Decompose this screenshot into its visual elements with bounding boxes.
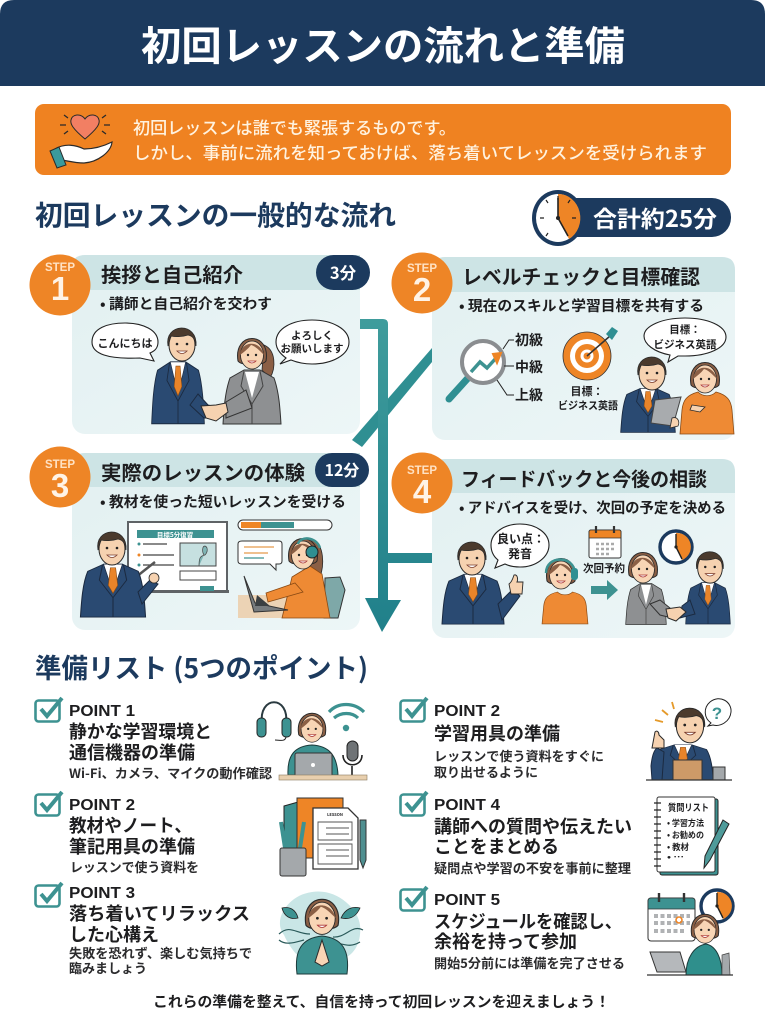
header bar <box>0 0 765 86</box>
icon: question list notebook <box>654 797 729 875</box>
step 3 heading: 実際のレッスンの体験 <box>101 457 305 486</box>
checklist: point 5: スケジュールを確認し、 <box>434 908 622 934</box>
step badge 1 <box>30 254 90 316</box>
icon: heart in hand <box>50 115 112 168</box>
speech bubble: goal: ビジネス英語 <box>654 337 717 352</box>
icon: magnifier levels: 上級 <box>515 385 543 405</box>
checklist: point 3: 落ち着いてリラックス <box>69 900 250 926</box>
speech bubble: greeting: こんにちは <box>98 335 152 351</box>
speech bubble: nice to meet you <box>276 320 349 364</box>
intro banner <box>35 104 731 175</box>
speech bubble: goal: 目標： <box>669 322 701 337</box>
step badge 3: STEP <box>45 459 75 471</box>
checklist: point 2 right: レッスンで使う資料をすぐに <box>434 746 604 765</box>
icon: target goal <box>558 327 618 413</box>
step 4 heading: フィードバックと今後の相談 <box>461 463 707 492</box>
speech bubble: greeting <box>92 323 158 361</box>
icon: target goal: 目標： <box>570 383 604 399</box>
speech bubble: goal <box>644 318 726 362</box>
icon: man with question: ? <box>712 704 722 723</box>
icon: clock <box>532 190 584 246</box>
step badge 2: STEP <box>407 263 437 275</box>
checklist: point 1: 通信機器の準備 <box>69 739 195 765</box>
step 4 bullet: • アドバイスを受け、次回の予定を決める <box>459 497 726 518</box>
step 1 bullet: • 講師と自己紹介を交わす <box>100 293 272 314</box>
icon: books and stationery: LESSON <box>327 812 343 818</box>
step badge 4: STEP <box>407 465 437 477</box>
duration pill: 12分 <box>325 457 359 481</box>
title: 初回レッスンの流れと準備 <box>141 14 625 72</box>
checklist: point 5 <box>400 887 733 975</box>
checklist: point 5: 余裕を持って参加 <box>434 928 577 954</box>
banner text <box>133 114 707 164</box>
total time badge: 合計約25分 <box>593 200 717 234</box>
arrow: next <box>591 580 618 600</box>
panel: step 2 <box>392 252 735 440</box>
icon: calendar <box>589 526 621 558</box>
illustration: tablet discussion <box>621 357 734 434</box>
speech bubble: good point: 良い点： <box>497 530 545 547</box>
checklist: point 4 <box>400 792 729 877</box>
step 2 heading: レベルチェックと目標確認 <box>462 261 700 290</box>
illustration: student with headset <box>238 538 345 618</box>
checklist: point 2 left: レッスンで使う資料を <box>70 857 199 876</box>
illustration: teacher <box>80 532 159 617</box>
illustration: handshake <box>152 328 281 424</box>
checklist: point 3: した心構え <box>69 921 159 947</box>
step 2 bullet: • 現在のスキルと学習目標を共有する <box>459 295 704 316</box>
checklist: point 2 right: POINT 2 <box>434 703 500 720</box>
icon: calm woman <box>279 891 363 974</box>
icon: question list notebook: • お勧めの <box>667 829 704 841</box>
step badge 1: STEP <box>45 262 75 274</box>
checklist: point 4: 疑問点や学習の不安を事前に整理 <box>434 858 631 877</box>
icon: target goal: ビジネス英語 <box>558 398 618 413</box>
panel: step 1 <box>30 254 370 434</box>
panel: step 3 <box>30 446 369 630</box>
step badge 4: 4 <box>413 473 432 510</box>
step badge 3: 3 <box>51 467 69 504</box>
duration pill: 3分 <box>330 260 357 284</box>
duration pill <box>315 453 369 487</box>
checklist: point 2 left: POINT 2 <box>69 797 135 814</box>
step 1 heading: 挨拶と自己紹介 <box>101 259 243 288</box>
banner text: 初回レッスンは誰でも緊張するものです。 <box>133 114 456 139</box>
checklist: point 2 left: 教材やノート、 <box>69 812 192 838</box>
heading: preparation list: 準備リスト (5つのポイント) <box>35 647 368 686</box>
chat bubble <box>238 541 282 570</box>
heading: general flow: 初回レッスンの一般的な流れ <box>35 193 396 233</box>
illustration: whiteboard: 目標5分復習 <box>157 529 193 539</box>
total time badge <box>532 190 731 246</box>
icon: question list notebook: 質問リスト <box>668 800 709 814</box>
checklist: point 2 left: 筆記用具の準備 <box>69 833 195 859</box>
checklist: point 2 right: 取り出せるように <box>434 762 538 781</box>
icon: schedule calendar and clock <box>647 890 733 975</box>
checklist: point 4: POINT 4 <box>434 797 500 814</box>
banner text: しかし、事前に流れを知っておけば、落ち着いてレッスンを受けられます <box>133 139 707 164</box>
step badge 1: 1 <box>51 270 69 307</box>
step badge 2: 2 <box>413 271 431 308</box>
checklist: point 5: 開始5分前には準備を完了させる <box>434 953 625 972</box>
icon: headset laptop wifi mic <box>257 702 367 780</box>
step badge 4 <box>392 452 452 514</box>
illustration: feedback teacher <box>442 542 523 624</box>
illustration: student with headset <box>542 558 588 624</box>
speech bubble: good point <box>491 524 549 568</box>
duration pill <box>316 255 370 290</box>
closing message: これらの準備を整えて、自信を持って初回レッスンを迎えましょう！ <box>153 991 610 1012</box>
icon: magnifier levels: 中級 <box>515 357 543 377</box>
icon: question list notebook: • … <box>667 851 684 863</box>
checklist: point 1: POINT 1 <box>69 703 135 720</box>
checklist: point 4: 講師への質問や伝えたい <box>434 813 632 839</box>
icon: magnifier levels: 初級 <box>515 330 543 350</box>
checklist: point 3: POINT 3 <box>69 885 135 902</box>
flow arrow <box>352 319 432 632</box>
illustration: whiteboard <box>126 522 229 593</box>
checklist: point 4: ことをまとめる <box>434 833 559 859</box>
panel: step 4 <box>392 452 735 638</box>
icon: magnifier levels <box>449 330 543 405</box>
progress bar <box>238 520 332 530</box>
checklist: point 5: POINT 5 <box>434 892 500 909</box>
icon: clock <box>660 531 692 563</box>
speech bubble: nice to meet you: よろしく <box>291 328 333 343</box>
icon: question list notebook: • 教材 <box>667 841 689 853</box>
next booking label: 次回予約 <box>583 560 625 576</box>
checklist: point 1: 静かな学習環境と <box>69 718 212 744</box>
illustration: closing handshake <box>626 552 730 625</box>
icon: man with question <box>646 699 732 780</box>
checklist: point 3: 失敗を恐れず、楽しむ気持ちで <box>69 943 252 962</box>
icon: books and stationery <box>280 798 366 876</box>
checklist: point 2 left <box>36 792 366 876</box>
checklist: point 1 <box>36 698 367 782</box>
speech bubble: nice to meet you: お願いします <box>280 341 344 356</box>
checklist: point 3: 臨みましょう <box>69 958 147 977</box>
step badge 3 <box>30 446 90 508</box>
speech bubble: good point: 発音 <box>508 545 532 562</box>
icon: question list notebook: • 学習方法 <box>667 817 704 829</box>
step 3 bullet: • 教材を使った短いレッスンを受ける <box>100 491 346 512</box>
checklist: point 2 right <box>400 698 732 781</box>
checklist: point 2 right: 学習用具の準備 <box>434 720 560 746</box>
step badge 2 <box>392 252 452 314</box>
checklist: point 1: Wi-Fi、カメラ、マイクの動作確認 <box>69 763 272 782</box>
checklist: point 3 <box>36 883 363 977</box>
